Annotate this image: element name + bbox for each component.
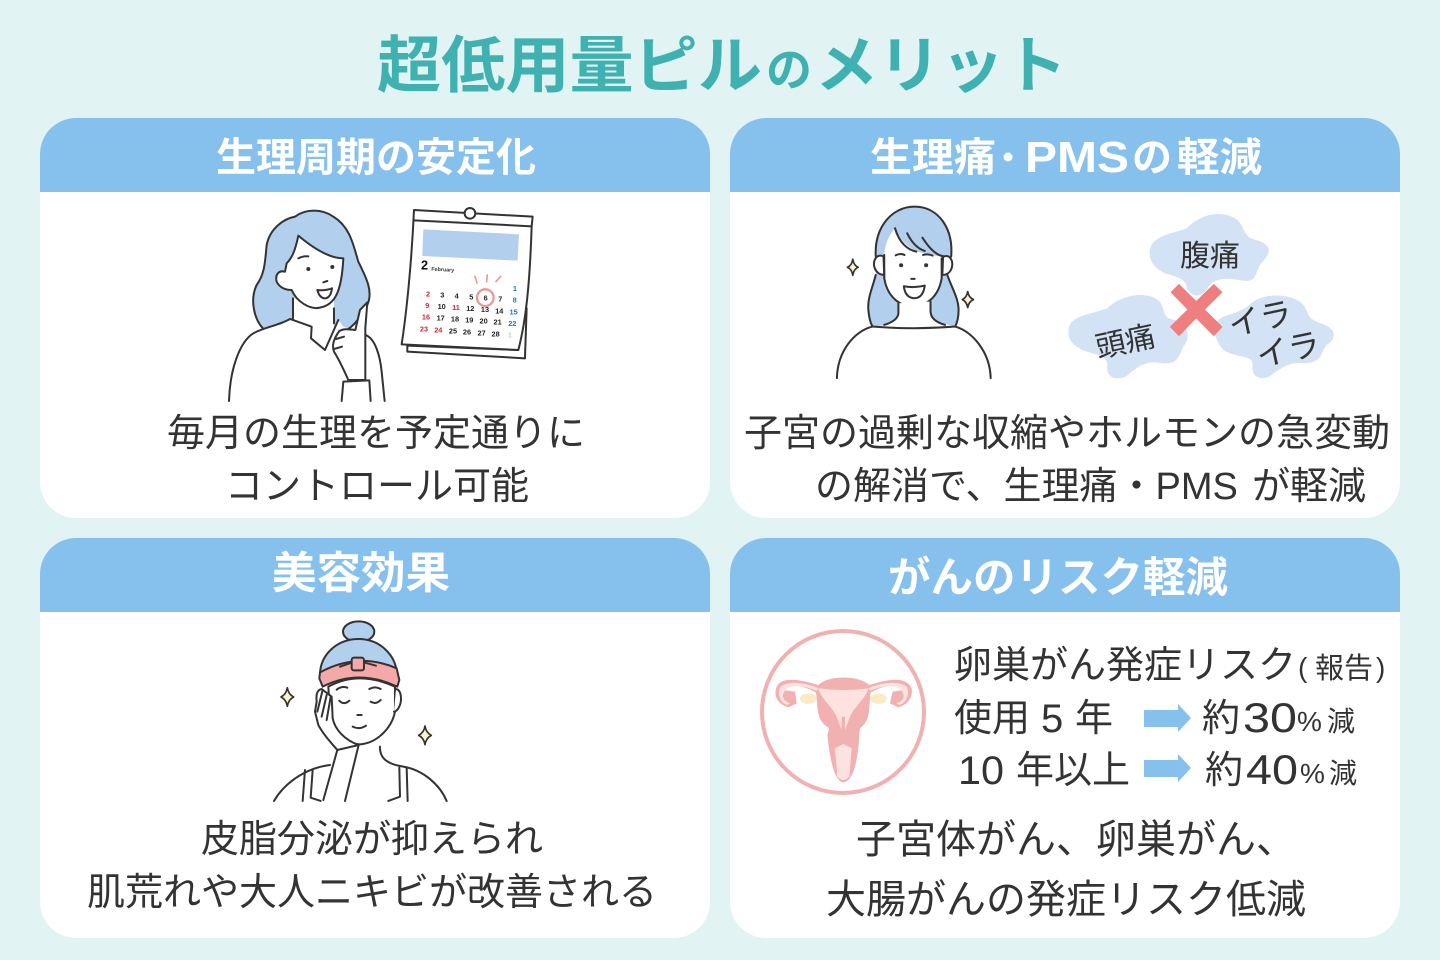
icon: calendar: 12 bbox=[466, 304, 474, 313]
icon: calendar: 2 bbox=[426, 289, 430, 298]
icon: calendar: 10 bbox=[438, 302, 446, 311]
icon: woman with headband bbox=[274, 621, 447, 801]
icon: calendar: 18 bbox=[451, 315, 459, 324]
text: 使用5年: 5 bbox=[1041, 697, 1063, 741]
icon: uterus in circle bbox=[762, 631, 924, 793]
icon: calendar: February bbox=[431, 267, 454, 274]
label: イライラ: イラ bbox=[1225, 295, 1295, 343]
text: 約40%減: 約 bbox=[1205, 750, 1243, 792]
heading bbox=[870, 133, 1262, 182]
panel header bbox=[40, 118, 710, 192]
icon: calendar: 21 bbox=[494, 318, 502, 327]
text block bbox=[826, 818, 1306, 922]
panel: 美容効果 bbox=[40, 538, 710, 938]
icon: calendar: 2 bbox=[421, 259, 428, 273]
arrow bbox=[1144, 754, 1191, 782]
icon: calendar: 6 bbox=[484, 293, 488, 302]
label: イライラ: イラ bbox=[1253, 325, 1323, 374]
icon: calendar: 28 bbox=[492, 329, 500, 338]
panel background bbox=[40, 538, 710, 938]
label: 腹痛: 腹痛 bbox=[1180, 240, 1240, 273]
panel: がんのリスク軽減 bbox=[730, 538, 1400, 938]
text: 使用5年: 年 bbox=[1075, 698, 1113, 740]
text block: 子宮体がん、卵巣がん、 bbox=[856, 818, 1296, 862]
icon: calendar: 9 bbox=[425, 301, 429, 310]
heading: 生理痛 bbox=[870, 136, 996, 180]
heading: がんのリスク軽減 bbox=[888, 554, 1228, 601]
text: 卵巣がん発症リスク: ) bbox=[1376, 652, 1385, 683]
text: 約40%減: % bbox=[1300, 758, 1325, 789]
icon: calendar: 7 bbox=[498, 294, 502, 303]
text block: 皮脂分泌が抑えられ bbox=[201, 819, 543, 861]
icon: calendar: 22 bbox=[508, 319, 516, 328]
heading: の bbox=[1132, 136, 1172, 180]
panel: 生理痛・PMSの軽減 bbox=[730, 118, 1400, 518]
panel background bbox=[730, 538, 1400, 938]
icon: calendar: 3 bbox=[440, 290, 444, 299]
text: 10年以上: 年以上 bbox=[1016, 750, 1130, 792]
text block: が軽減 bbox=[1252, 466, 1366, 508]
title: 超低用量ピル bbox=[377, 32, 762, 101]
icon: smiling woman bbox=[837, 207, 991, 379]
text: 約30%減: 30 bbox=[1243, 694, 1297, 741]
panel: 生理周期の安定化 bbox=[40, 118, 710, 518]
text block bbox=[87, 819, 657, 914]
icon: calendar: 23 bbox=[420, 325, 428, 334]
icon: calendar: 1 bbox=[513, 284, 517, 293]
text: 約30%減: 約 bbox=[1202, 698, 1240, 740]
icon: woman pointing bbox=[229, 211, 385, 401]
text block: 子宮の過剰な収縮やホルモンの急変動 bbox=[744, 413, 1390, 455]
panel background bbox=[40, 118, 710, 518]
text block: の解消で、生理痛・PMS bbox=[815, 466, 1238, 508]
icon: calendar bbox=[402, 208, 533, 358]
label: イライラ bbox=[1225, 290, 1323, 378]
text block bbox=[167, 413, 585, 508]
text: 約30%減: 減 bbox=[1327, 706, 1355, 737]
icon: calendar: 1 bbox=[508, 330, 512, 339]
text: 使用5年: 使用 bbox=[954, 698, 1030, 740]
title: メリット bbox=[815, 32, 1067, 101]
label: 頭痛: 頭痛 bbox=[1093, 320, 1158, 365]
heading: 生理周期の安定化 bbox=[216, 136, 536, 180]
icon: calendar: 4 bbox=[455, 291, 460, 300]
title bbox=[377, 32, 1067, 101]
icon: calendar: 16 bbox=[422, 313, 430, 322]
text: 卵巣がん発症リスク: ( bbox=[1298, 652, 1308, 683]
text: 約30%減: % bbox=[1297, 706, 1322, 737]
icon: calendar: 19 bbox=[465, 316, 473, 325]
text: 約40%減: 減 bbox=[1329, 758, 1357, 789]
icon: calendar: 24 bbox=[434, 326, 443, 335]
text: 約40%減: 40 bbox=[1246, 746, 1298, 793]
icon: calendar: 25 bbox=[449, 326, 457, 335]
icon: calendar: 27 bbox=[478, 328, 486, 337]
heading: 美容効果 bbox=[272, 549, 450, 598]
text: 約30%減 bbox=[1202, 694, 1355, 741]
icon: calendar: 26 bbox=[463, 327, 471, 336]
icon: calendar: 13 bbox=[481, 305, 489, 314]
text: 使用5年 bbox=[954, 697, 1113, 741]
text: 卵巣がん発症リスク: 報告 bbox=[1315, 652, 1373, 685]
panel background bbox=[730, 118, 1400, 518]
text block: 肌荒れや大人ニキビが改善される bbox=[87, 872, 657, 914]
heading: PMS bbox=[1025, 133, 1129, 182]
arrow bbox=[1144, 704, 1191, 732]
panel header bbox=[730, 118, 1400, 192]
icon: symptom blobs bbox=[1068, 214, 1334, 378]
heading: 軽減 bbox=[1177, 136, 1262, 180]
icon: calendar: 11 bbox=[452, 303, 460, 312]
icon: calendar: 20 bbox=[480, 317, 488, 326]
text: 10年以上 bbox=[958, 749, 1130, 793]
panel header bbox=[40, 538, 710, 612]
title: の bbox=[766, 44, 812, 96]
text block bbox=[744, 413, 1390, 508]
text block: 大腸がんの発症リスク低減 bbox=[826, 878, 1306, 922]
icon: calendar: 17 bbox=[437, 314, 445, 323]
panel header bbox=[730, 538, 1400, 612]
text: 10年以上: 10 bbox=[958, 749, 1004, 793]
text: 卵巣がん発症リスク: 卵巣がん発症リスク bbox=[954, 645, 1296, 687]
icon: calendar: 8 bbox=[513, 295, 517, 304]
icon: calendar: 14 bbox=[495, 306, 504, 315]
text block: コントロール可能 bbox=[225, 466, 529, 508]
icon: calendar: 15 bbox=[510, 307, 518, 316]
icon: calendar: 5 bbox=[469, 292, 473, 301]
text block: 毎月の生理を予定通りに bbox=[167, 413, 585, 455]
text: 約40%減 bbox=[1205, 746, 1357, 793]
